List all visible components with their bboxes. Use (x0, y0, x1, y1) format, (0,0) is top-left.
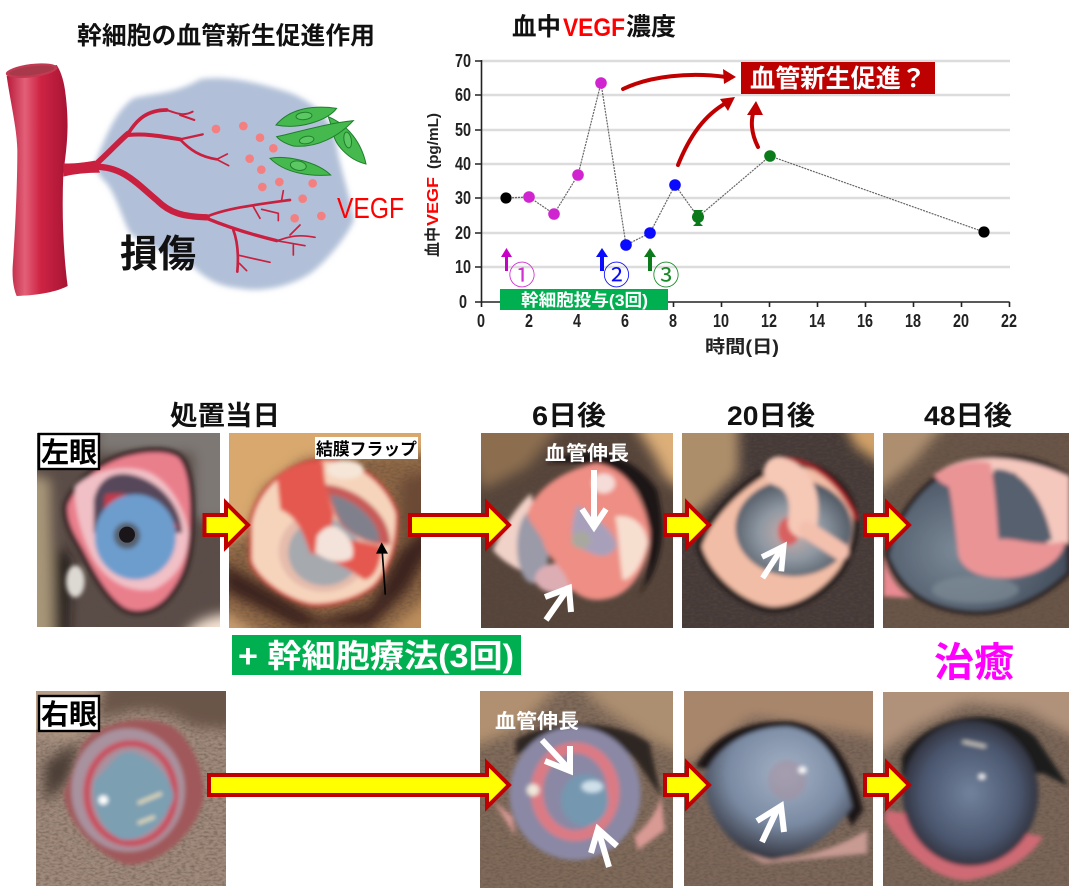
stem cell dosing bar (500, 289, 668, 310)
VEGF particles (212, 122, 326, 223)
title: stem cell angiogenesis: 幹細胞の血管新生促進作用 (77, 22, 375, 50)
dose arrow 1 (501, 248, 512, 271)
x axis tick labels: 20 (953, 311, 969, 331)
dose number 1: ① (508, 261, 536, 291)
photo: right eye day 20 (684, 691, 873, 886)
y axis tick labels: 40 (455, 154, 471, 174)
icon: stem cells (270, 107, 366, 175)
flow arrows, right eye row (209, 763, 909, 807)
x axis tick labels: 14 (809, 311, 825, 331)
y axis tick labels: 10 (455, 257, 471, 277)
column heading: day 48: 48日後 (924, 401, 1012, 431)
flow arrows, left eye row (204, 503, 909, 547)
x axis tick labels: 2 (525, 311, 533, 331)
label: right eye: 右眼 (41, 699, 97, 730)
x axis tick labels: 10 (713, 311, 729, 331)
y axis tick labels: 60 (455, 85, 471, 105)
x axis tick labels (477, 311, 1017, 331)
photo: right eye day 6 (480, 691, 673, 888)
label: injury: 損傷 (120, 234, 196, 276)
white arrow (762, 546, 784, 578)
column heading: treatment day: 処置当日 (170, 401, 280, 431)
photo: left eye day 48 (883, 433, 1069, 628)
heading: cured: 治癒 (934, 641, 1014, 685)
main blood vessel (5, 61, 68, 296)
photo: right eye, treatment day (36, 691, 226, 886)
label: VEGF: VEGF (337, 193, 404, 225)
y axis tick labels (455, 51, 471, 312)
chart: blood VEGF concentration (424, 51, 1017, 357)
x axis tick labels: 6 (621, 311, 629, 331)
label: left eye: 左眼 (41, 437, 97, 468)
column heading: day 20: 20日後 (727, 401, 815, 431)
x axis title: 時間(日) (705, 337, 779, 357)
chart title: 血中 (512, 13, 561, 41)
x axis tick labels: 18 (905, 311, 921, 331)
label: vessel extension, right eye: 血管伸長 (495, 710, 579, 733)
chart title: 濃度 (626, 13, 676, 41)
dose arrow 2 (596, 248, 608, 271)
label: vessel extension, left eye: 血管伸長 (545, 442, 629, 465)
column heading: day 6: 6日後 (532, 401, 606, 431)
black arrow (382, 553, 385, 595)
photo: left eye with conjunctival flap (229, 433, 421, 628)
y axis title: 血中 (424, 227, 442, 257)
chart title: VEGF (563, 14, 625, 42)
x axis tick labels: 12 (761, 311, 777, 331)
y axis title: (pg/mL) (425, 113, 442, 169)
curved arrows to callout (623, 69, 763, 165)
photo: left eye day 6 (481, 433, 673, 628)
label: conjunctival flap: 結膜フラップ (316, 440, 417, 459)
y axis tick labels: 30 (455, 188, 471, 208)
photo: left eye, treatment day (37, 433, 220, 627)
y axis title (424, 113, 442, 257)
white arrows (542, 740, 617, 867)
dose number 3: ③ (652, 261, 680, 291)
photo: left eye day 20 (682, 433, 874, 628)
stem cell dosing bar: 幹細胞投与(3回) (521, 290, 648, 310)
y axis tick labels: 0 (459, 292, 467, 312)
x axis tick labels: 0 (477, 311, 485, 331)
chart title (512, 13, 676, 42)
white arrow (757, 806, 784, 842)
dose arrow 3 (644, 248, 656, 271)
x axis tick labels: 16 (857, 311, 873, 331)
axes (475, 60, 1010, 307)
x axis tick labels: 22 (1001, 311, 1017, 331)
y axis tick labels: 50 (455, 120, 471, 140)
diagram: vessel growth into injured tissue (5, 61, 366, 296)
dose number 2: ② (603, 261, 630, 291)
banner: stem cell therapy (3 times): + 幹細胞療法(3回) (238, 638, 514, 674)
injured tissue area (95, 78, 354, 290)
y axis tick labels: 20 (455, 223, 471, 243)
x axis tick labels: 4 (573, 311, 581, 331)
branching capillaries (63, 110, 315, 272)
white arrows (545, 470, 606, 620)
callout: promote angiogenesis?: 血管新生促進？ (750, 65, 926, 93)
photo: right eye day 48 (883, 692, 1069, 886)
y axis tick labels: 70 (455, 51, 471, 71)
x axis tick labels: 8 (669, 311, 677, 331)
data line (506, 83, 984, 245)
data points (500, 77, 990, 251)
y axis title: VEGF (425, 177, 442, 226)
